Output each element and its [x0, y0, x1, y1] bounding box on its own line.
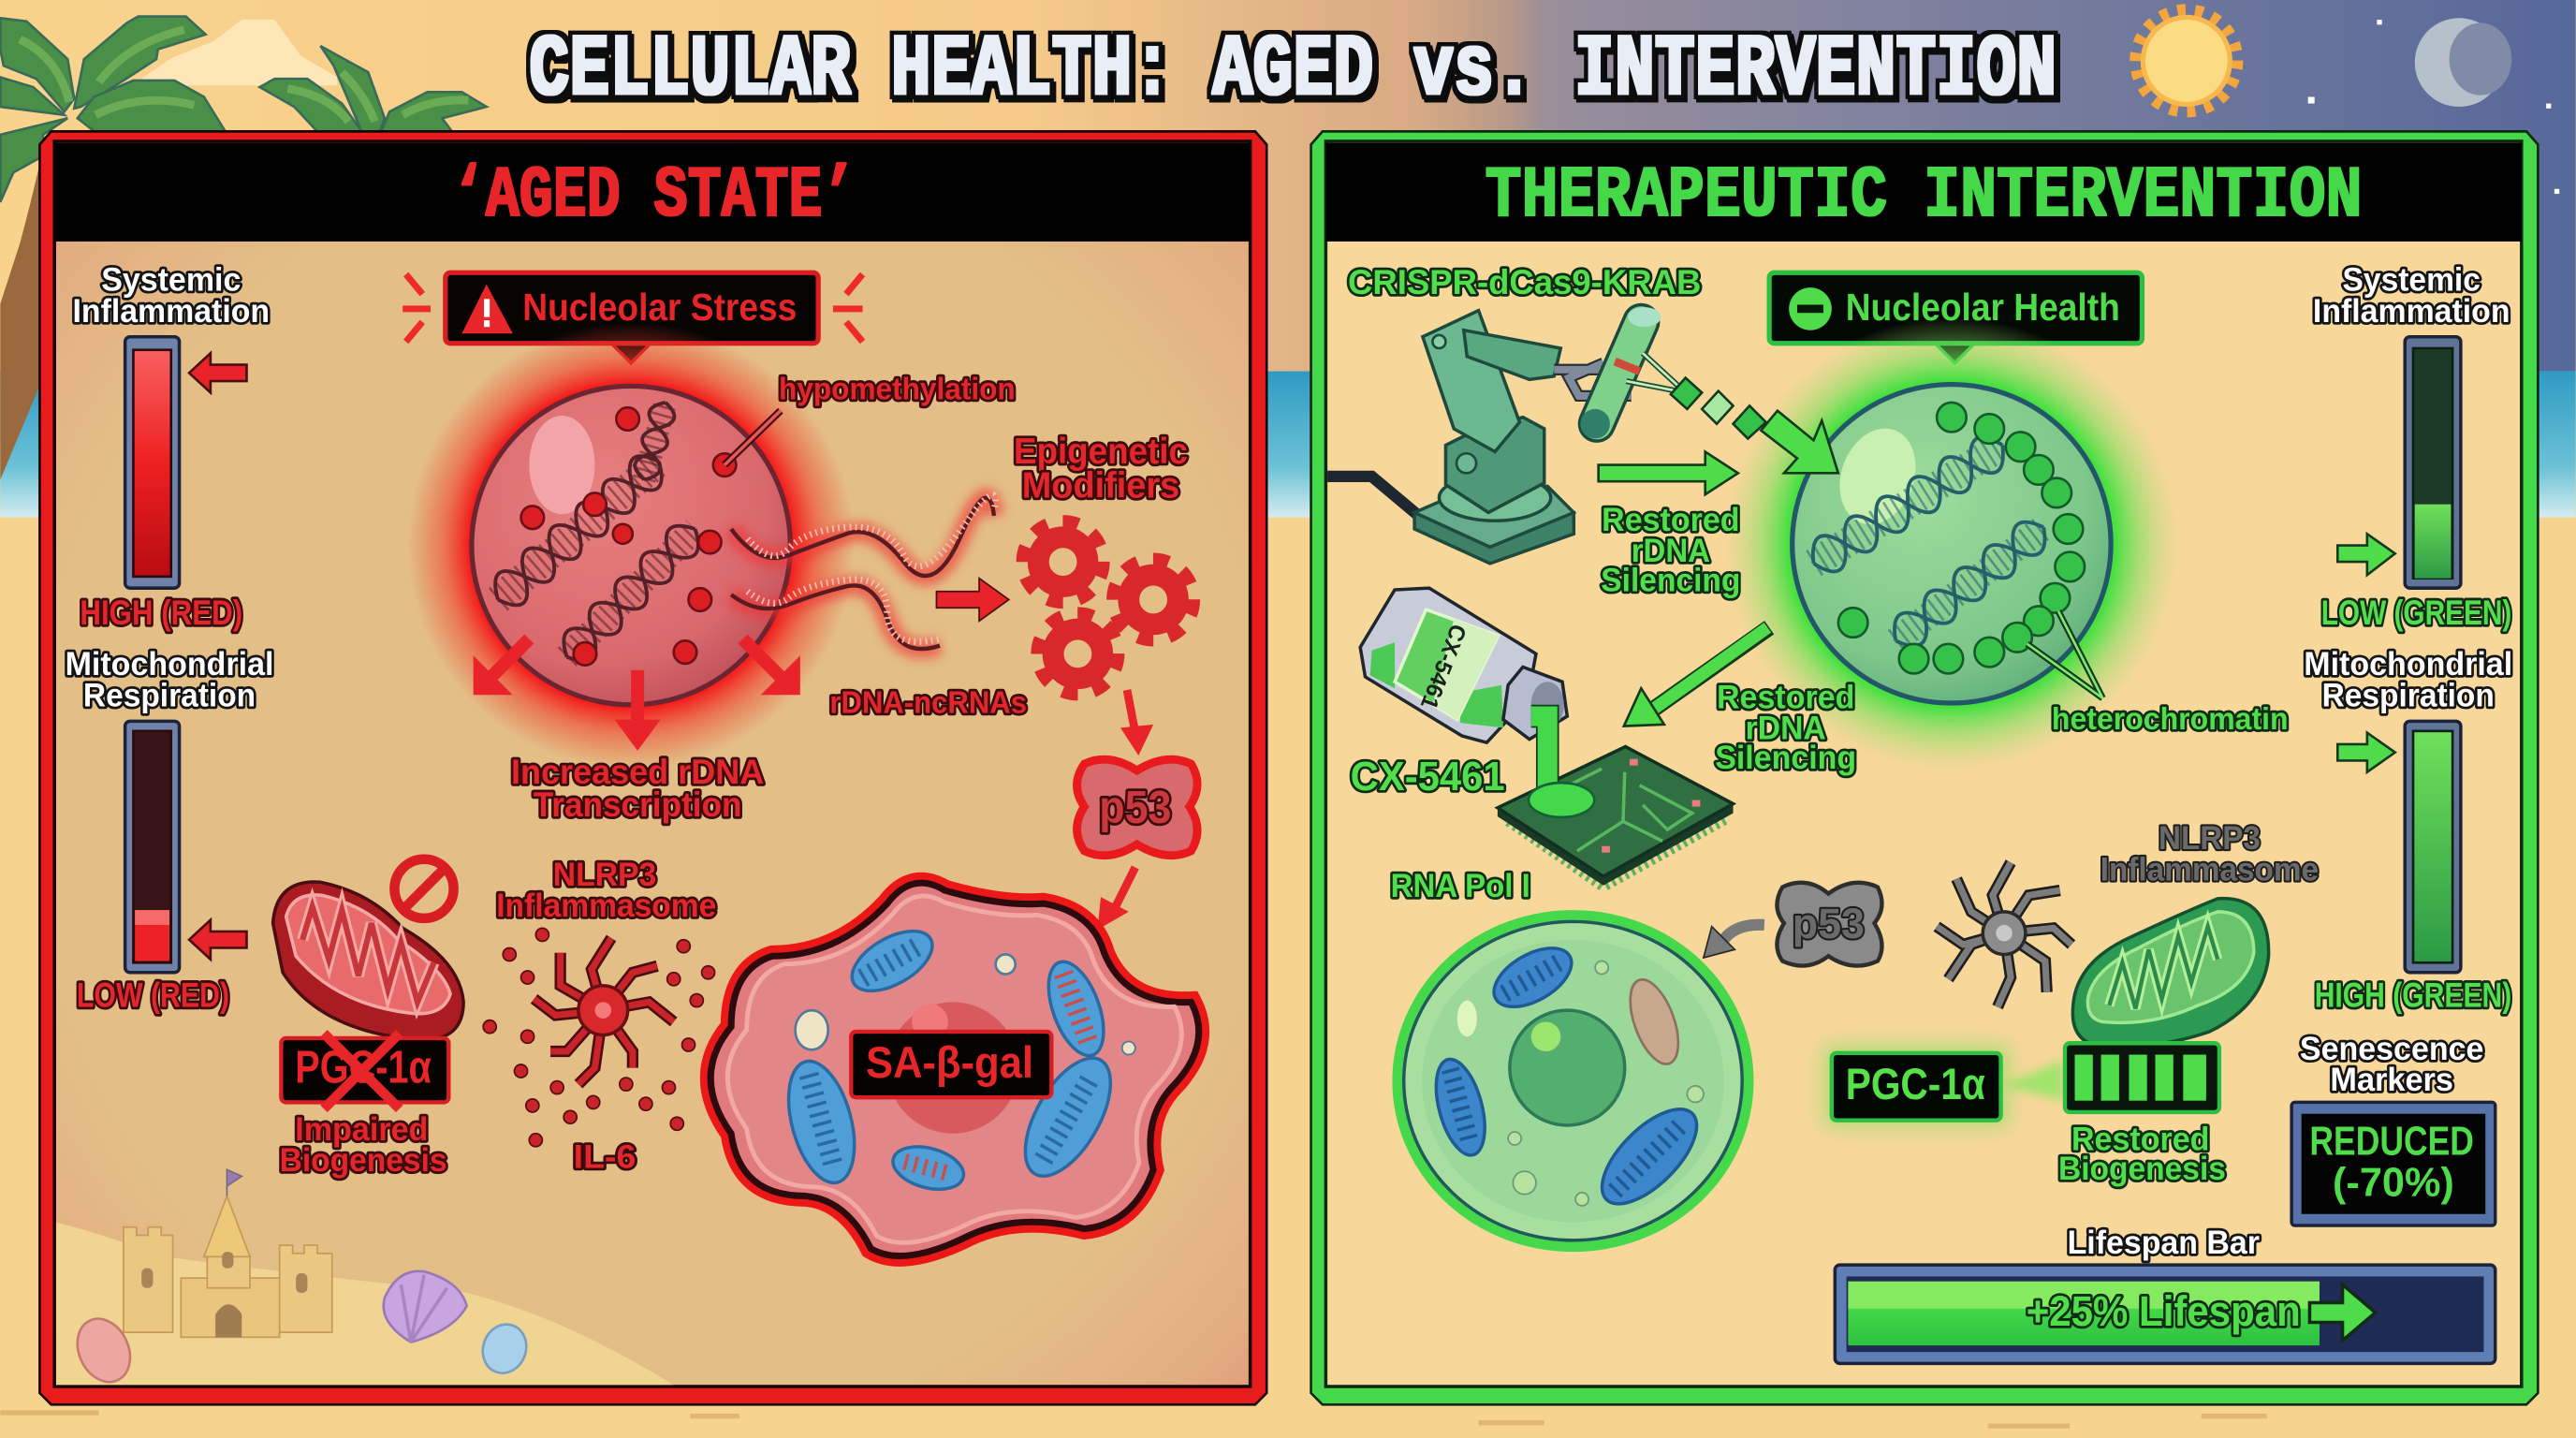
icon: prohibition sign [394, 859, 454, 918]
label: increased rDNA transcription: Transcription [534, 785, 742, 824]
arrow: p53 to healthy cell [1721, 925, 1764, 943]
stat box: reduced -70%: (-70%) [2333, 1159, 2454, 1205]
gauge: mitochondrial respiration low: Mitochondrial [66, 646, 273, 682]
nucleus: aged [407, 322, 855, 769]
label: senescence markers [2300, 1031, 2483, 1098]
gauge: mitochondrial respiration high: Mitochondrial [2304, 646, 2512, 682]
label: NLRP3 inflammasome healthy: NLRP3 [2159, 820, 2261, 857]
gauge: mitochondrial respiration low [66, 646, 273, 1015]
sand dune and castle [56, 1169, 674, 1390]
arrows: nucleus outputs [474, 639, 800, 751]
label: senescence markers: Senescence [2300, 1031, 2483, 1067]
panel: aged state [39, 131, 1266, 1404]
inflammasome: inactive [1937, 862, 2071, 1007]
arrow head: p53 gray [1704, 927, 1734, 958]
p53 protein: aged: p53 [1099, 783, 1171, 833]
label: lifespan bar: Lifespan Bar [2068, 1225, 2260, 1261]
marker: SA-β-gal: SA-β-gal [866, 1038, 1033, 1088]
battery: restored biogenesis [2065, 1043, 2219, 1112]
label: NLRP3 inflammasome aged: Inflammasome [496, 888, 716, 924]
gauge: systemic inflammation high: HIGH (RED) [80, 594, 242, 632]
icon: gears [1023, 522, 1193, 693]
label: epigenetic modifiers: Epigenetic [1014, 432, 1188, 472]
label: restored rDNA silencing lower [1715, 679, 1856, 776]
PGC-1α blocked [281, 1034, 448, 1108]
gauge: mitochondrial respiration low: LOW (RED) [77, 976, 229, 1015]
label: heterochromatin: heterochromatin [2052, 702, 2289, 737]
label: epigenetic modifiers [1014, 432, 1188, 506]
inflammasome and IL-6 particles [483, 928, 715, 1147]
PGC-1α blocked: PGC-1α [295, 1042, 432, 1093]
label: NLRP3 inflammasome healthy [2100, 820, 2319, 888]
rDNA-ncRNA strands [731, 495, 995, 649]
arrow: p53 to senescent cell [1097, 867, 1135, 930]
label: restored rDNA silencing top: rDNA [1632, 533, 1710, 569]
gauge: mitochondrial respiration high [2304, 646, 2512, 1015]
gauge: systemic inflammation high: Inflammation [73, 293, 270, 330]
label: restored rDNA silencing top: Silencing [1601, 563, 1740, 599]
PGC-1α active [1823, 1045, 2009, 1127]
label: epigenetic modifiers: Modifiers [1022, 466, 1179, 506]
stat box: reduced -70% [2291, 1102, 2496, 1225]
senescent cell [710, 883, 1199, 1255]
robot arm with CRISPR tube [1327, 307, 1838, 564]
label: restored rDNA silencing top: Restored [1602, 502, 1740, 538]
panel header: aged state: ‘AGED STATE’ [452, 156, 856, 238]
label: hypomethylation [724, 372, 1016, 465]
label: restored rDNA silencing lower: Restored [1717, 679, 1854, 715]
stat box: reduced -70%: REDUCED [2309, 1119, 2474, 1165]
label: impaired biogenesis: Biogenesis [280, 1142, 447, 1179]
arrow: restored silencing top [1599, 452, 1738, 494]
sun [2135, 10, 2237, 111]
callout: nucleolar health [1769, 272, 2142, 363]
chip: RNA Pol I [1498, 716, 1734, 888]
palm trees [0, 17, 487, 479]
label: hypomethylation: hypomethylation [779, 372, 1016, 406]
panel header: aged state [54, 143, 1251, 242]
gauge: mitochondrial respiration low: Respiration [83, 678, 256, 714]
bottle: CX-5461 [1360, 588, 1567, 742]
moon and stars [2308, 18, 2559, 194]
p53 protein: healthy: p53 [1793, 900, 1865, 947]
title: CELLULAR HEALTH: AGED vs. INTERVENTION [529, 22, 2056, 120]
callout: nucleolar stress: Nucleolar Stress [522, 286, 797, 329]
label: NLRP3 inflammasome aged: NLRP3 [553, 857, 656, 893]
p53 protein: aged [1077, 759, 1197, 856]
panel header: therapeutic intervention: THERAPEUTIC INTERVENTION [1486, 156, 2363, 238]
label: senescence markers: Markers [2330, 1062, 2453, 1098]
gauge: systemic inflammation low: Systemic [2343, 262, 2481, 299]
label: CX-5461: CX-5461 [1351, 754, 1505, 800]
callout: nucleolar stress [402, 272, 863, 363]
label: NLRP3 inflammasome aged [496, 857, 716, 924]
label: heterochromatin [2027, 611, 2289, 737]
label: NLRP3 inflammasome healthy: Inflammasome [2100, 852, 2319, 888]
gauge: mitochondrial respiration high: Respiration [2322, 678, 2495, 714]
gauge: mitochondrial respiration high: HIGH (GREEN) [2315, 976, 2511, 1015]
healthy cell [1398, 915, 1749, 1247]
label: increased rDNA transcription: Increased rDNA [511, 753, 764, 791]
label: restored biogenesis: Restored [2071, 1121, 2209, 1157]
label: impaired biogenesis [280, 1111, 447, 1179]
panel: therapeutic intervention [1311, 131, 2538, 1404]
label: restored rDNA silencing lower: Silencing [1715, 740, 1856, 776]
lifespan bar: +25% Lifespan [2027, 1287, 2301, 1335]
label: restored biogenesis: Biogenesis [2058, 1151, 2226, 1187]
label: impaired biogenesis: Impaired [295, 1111, 428, 1148]
lifespan bar [1835, 1265, 2496, 1363]
label: CRISPR-dCas9-KRAB: CRISPR-dCas9-KRAB [1348, 263, 1701, 301]
label: restored rDNA silencing top [1601, 502, 1740, 599]
arrow: to epigenetic modifiers [936, 579, 1009, 621]
label: IL-6: IL-6 [574, 1139, 636, 1176]
gauge: systemic inflammation high: Systemic [101, 262, 241, 299]
arrow: gears to p53 [1120, 690, 1153, 756]
label: restored biogenesis [2058, 1121, 2226, 1187]
bottle: CX-5461: CX-5461 [1415, 621, 1471, 712]
glow connector [2002, 1060, 2063, 1101]
nucleus: healthy [1725, 317, 2178, 770]
gauge: systemic inflammation high [73, 262, 270, 632]
marker: SA-β-gal [851, 1032, 1051, 1097]
label: restored rDNA silencing lower: rDNA [1746, 711, 1826, 747]
label: rDNA-ncRNAs: rDNA-ncRNAs [829, 686, 1027, 721]
mitochondrion: restored [2072, 899, 2269, 1047]
gauge: systemic inflammation low: Inflammation [2313, 293, 2510, 330]
PGC-1α active: PGC-1α [1846, 1060, 1985, 1109]
callout: nucleolar health: Nucleolar Health [1846, 286, 2120, 329]
label: increased rDNA transcription [511, 753, 764, 824]
label: RNA Pol I: RNA Pol I [1391, 868, 1530, 904]
p53 protein: healthy [1777, 883, 1881, 966]
gauge: systemic inflammation low: LOW (GREEN) [2321, 594, 2511, 632]
arrow: restored silencing to chip [1624, 627, 1769, 726]
gauge: systemic inflammation low [2313, 262, 2511, 632]
mitochondrion: damaged [273, 882, 463, 1040]
